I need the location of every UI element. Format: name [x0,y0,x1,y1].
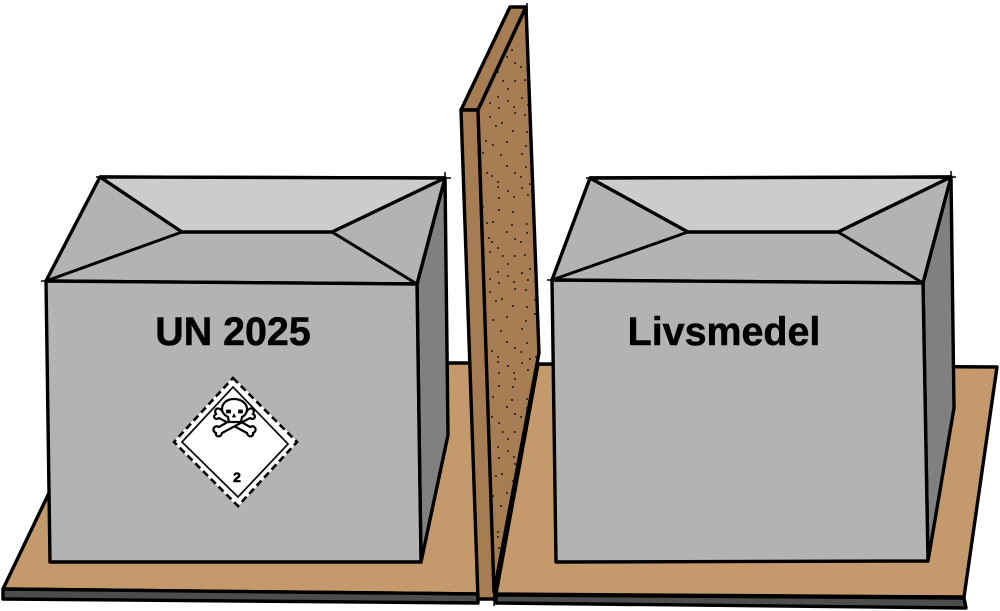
partition wall [461,3,539,606]
icon: skull and crossbones [213,399,256,436]
label: UN 2025: UN 2025 [155,310,311,354]
hazard class number: 2 [233,469,241,485]
partition speckle [483,50,536,561]
right box [547,171,956,562]
hazard diamond: toxic gas class 2 [173,377,298,507]
left box [41,172,451,562]
label: Livsmedel: Livsmedel [628,310,820,354]
right pallet [496,364,997,608]
left pallet [3,363,478,603]
